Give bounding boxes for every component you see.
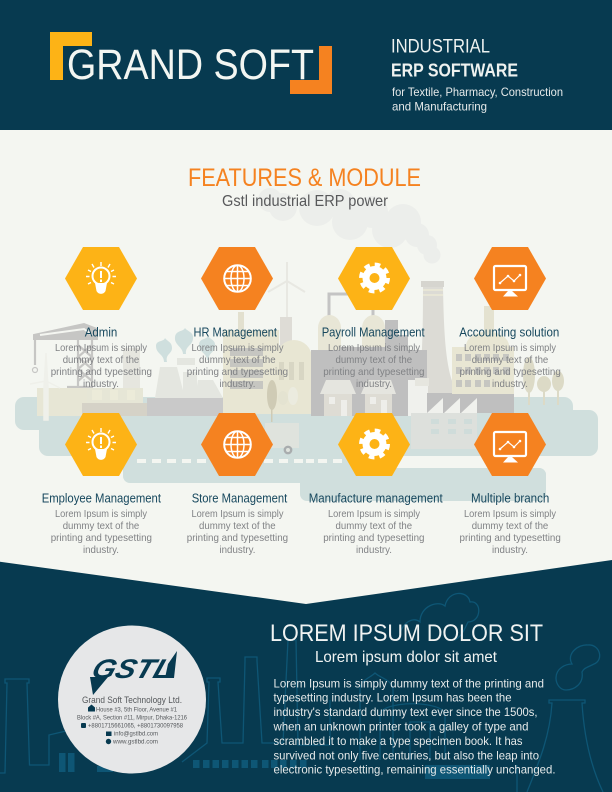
GSTL logo [88,651,178,695]
description [187,342,288,390]
description [460,508,561,556]
description: Lorem Ipsum is simply [192,508,284,520]
description: Lorem Ipsum is simply [55,342,148,354]
title: Store Management [192,492,288,506]
description: dummy text of the [199,520,276,532]
title: Multiple branch [471,492,549,506]
hexagon icon: gear [338,247,410,310]
description: printing and typesetting [323,532,425,544]
description: Lorem Ipsum is simply [192,342,284,354]
background illustration: industrial town [15,188,598,501]
description [51,508,152,556]
description [460,342,561,390]
hexagon icon: gear [338,413,410,476]
description: printing and typesetting [460,532,561,544]
description [187,508,288,556]
website: www.gstlbd.com [112,740,158,746]
description: industry. [220,378,256,390]
phone: +8801715661065, +8801730097958 [88,724,184,730]
description: dummy text of the [472,354,548,366]
GSTL logo: GSTL [88,654,178,684]
title: Manufacture management [309,492,443,506]
hexagon icon: monitor chart [474,247,546,310]
description: printing and typesetting [187,532,288,544]
description: industry. [83,544,119,556]
hexagon icon: globe [201,247,273,310]
description: dummy text of the [472,520,548,532]
footer panel [0,560,612,792]
logo: Grand Soft: GRAND SOFT [67,41,314,89]
logo: Grand Soft [50,32,332,94]
header tagline: INDUSTRIAL [391,36,490,58]
road dashes [137,459,342,463]
description: Lorem Ipsum is simply [55,508,148,520]
footer outline factory art [0,593,603,792]
teal smoke puffs [156,328,215,362]
footer paragraph: electronic typesetting, remaining essentially unchanged. [274,763,556,777]
hexagon icon: light bulb [65,247,137,310]
footer heading [270,620,543,666]
company name: Grand Soft Technology Ltd. [82,695,182,706]
description: printing and typesetting [460,366,561,378]
title: Admin [85,326,117,340]
feature: Store Management [187,413,288,556]
hexagon icon: light bulb [65,413,137,476]
description: Lorem Ipsum is simply [328,342,421,354]
contact badge [58,626,206,774]
footer paragraph: when an unknown printer took a galley of type and [273,720,528,734]
heading: Gstl industrial ERP power [222,193,389,210]
feature: Admin [51,247,152,390]
feature: HR Management [187,247,288,390]
footer paragraph: survived not only five centuries, but also the leap into [274,748,539,762]
road [15,397,598,501]
address lines: House #3, 5th Floor, Avenue #1 [96,708,178,714]
address lines [77,704,188,722]
cooling towers [147,358,228,416]
description [51,342,152,390]
right cream building [452,306,514,394]
header tagline: ERP SOFTWARE [391,60,518,80]
left factory [30,348,147,420]
description: dummy text of the [336,354,412,366]
crane [32,324,97,387]
description: dummy text of the [63,520,139,532]
header band [0,0,612,130]
hexagon icon: monitor chart [474,413,546,476]
cooling tower center right [416,281,458,394]
description: industry. [356,378,392,390]
description: printing and typesetting [51,366,152,378]
description [323,342,425,390]
central cream buildings [223,262,312,422]
footer paragraph [273,676,556,777]
description: industry. [492,378,528,390]
description: industry. [83,378,119,390]
feature: Employee Management [42,413,161,556]
footer paragraph: Lorem Ipsum is simply dummy text of the printing and [274,676,544,690]
description: dummy text of the [336,520,412,532]
trees [523,357,564,405]
footer paragraph: scrambled it to make a type specimen book. It has [274,734,522,748]
description: industry. [220,544,256,556]
description: Lorem Ipsum is simply [464,342,557,354]
description: dummy text of the [199,354,276,366]
description: Lorem Ipsum is simply [464,508,557,520]
smoke cloud [258,188,440,264]
description: printing and typesetting [323,366,425,378]
feature: Multiple branch [460,413,561,556]
description: Lorem Ipsum is simply [328,508,421,520]
title: Payroll Management [322,326,425,340]
hexagon icon: globe [201,413,273,476]
description [323,508,425,556]
footer paragraph: industry's standard dummy text ever since the 1500s, [274,705,538,719]
description: printing and typesetting [187,366,288,378]
title: Accounting solution [459,326,559,340]
heading [188,164,421,210]
email: info@gstlbd.com [114,732,158,738]
address lines: Block #A, Section #11, Mirpur, Dhaka-1216 [77,716,188,722]
title: HR Management [194,326,277,340]
feature: Payroll Management [322,247,425,390]
title: Employee Management [42,492,161,506]
footer paragraph: typesetting industry. Lorem Ipsum has been the [274,691,512,705]
description: industry. [356,544,392,556]
footer heading: LOREM IPSUM DOLOR SIT [270,620,543,647]
description: printing and typesetting [51,532,152,544]
header tagline [391,36,563,114]
sawtooth factory [411,393,514,449]
footer heading: Lorem ipsum dolor sit amet [315,649,498,666]
feature: Manufacture management [309,413,443,556]
description: industry. [492,544,528,556]
heading: FEATURES & MODULE [188,164,421,192]
header tagline: for Textile, Pharmacy, Construction [392,85,563,99]
feature: Accounting solution [459,247,561,390]
footer filled blocks [59,753,490,779]
header tagline: and Manufacturing [392,100,487,114]
grey factory with houses [311,294,429,416]
description: dummy text of the [63,354,139,366]
truck [265,423,299,453]
